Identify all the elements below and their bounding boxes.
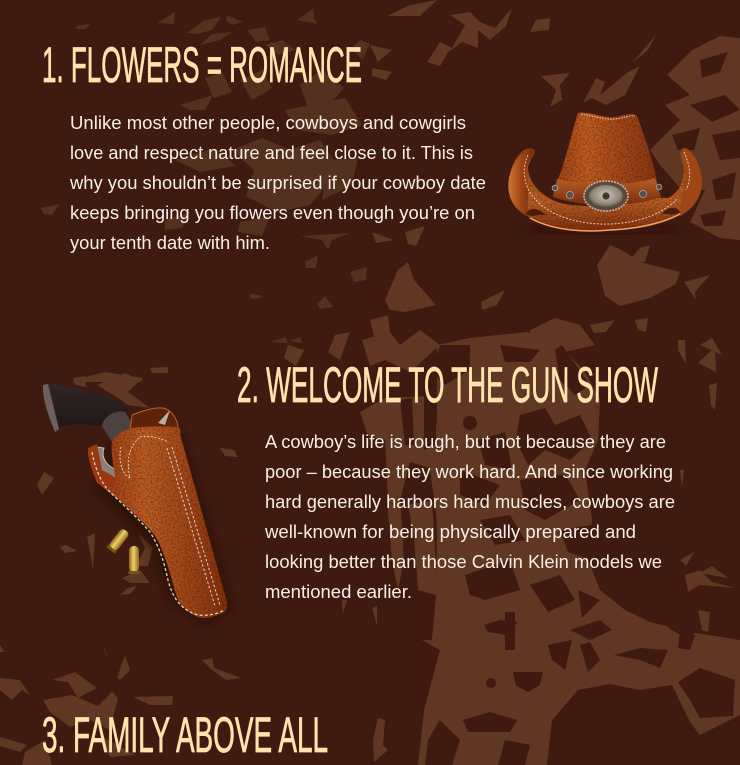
trigger guard [95,447,120,478]
revolver grip [43,383,134,442]
heading: 1. Flowers = Romance: 1. FLOWERS = ROMANCE [42,37,362,93]
text block: section 2: A cowboy’s life is rough, but not because they are [265,432,666,452]
text block: section 1: why you shouldn’t be surprised if your cowboy date [69,173,486,193]
holster body [100,426,227,618]
background pattern: dark gaps in silhouette [398,52,740,765]
hat band [553,178,661,205]
hat brim [509,148,701,230]
icon: revolver in leather holster [43,383,232,624]
icon: leather cowboy hat [508,113,702,233]
hat buckle [584,181,628,211]
text block: section 1: keeps bringing you flowers even though you’re on [70,203,475,223]
holster belt loop [88,444,120,492]
text block: section 1: your tenth date with him. [70,233,270,253]
holster back and front sight [130,408,178,432]
text block: section 2: mentioned earlier. [265,582,412,602]
bullet 2 [128,546,140,574]
heading: 3. Family above all: 3. FAMILY ABOVE ALL [42,707,328,763]
text block: section 2 [264,432,675,602]
text block: section 2: poor – because they work hard. And since working [265,462,673,482]
text block: section 2: well-known for being physically prepared and [264,522,636,542]
background pattern: faint leaves upper left [40,9,370,343]
text block: section 1: love and respect nature and feel close to it. This is [70,143,473,163]
hat crown [553,113,660,203]
hat studs [552,184,662,199]
text block: section 2: hard generally harbors hard muscles, cowboys are [265,492,675,512]
bullet 1 [106,527,130,554]
text block: section 1: Unlike most other people, cowboys and cowgirls [70,113,466,133]
text block: section 1 [69,113,486,253]
text block: section 2: looking better than those Calvin Klein models we [265,552,662,572]
